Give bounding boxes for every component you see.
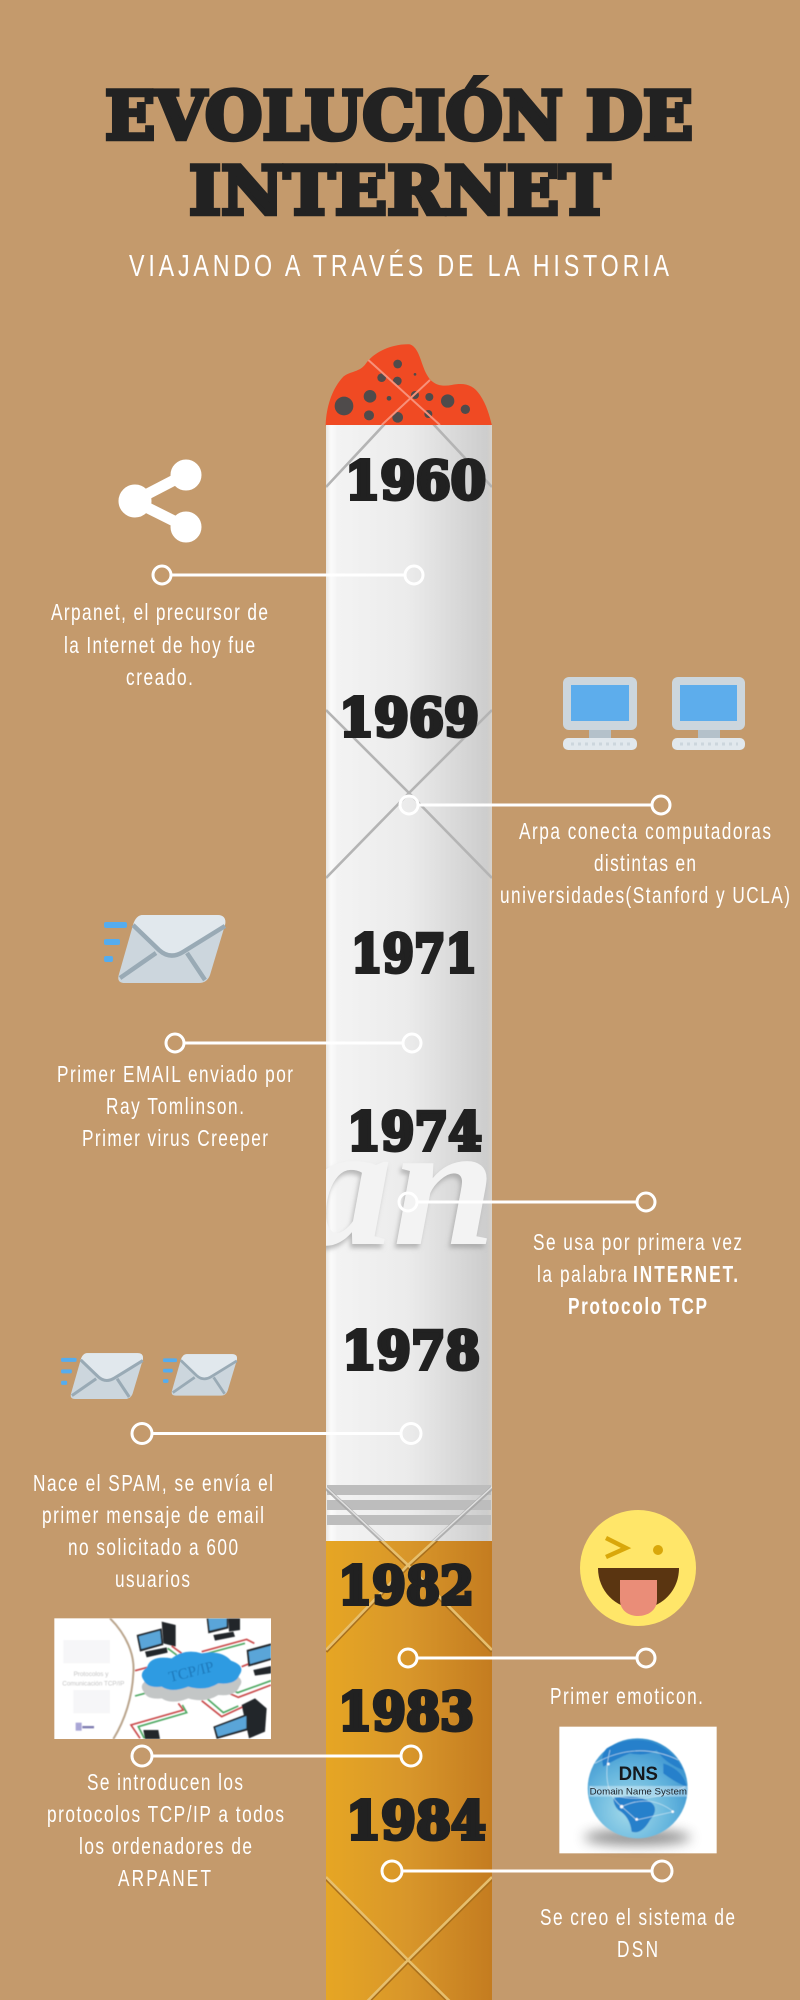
text 1984 xyxy=(540,1906,735,1963)
year: 1971: 1971 xyxy=(351,924,477,985)
small envelope right xyxy=(163,1354,237,1396)
watermark word on paper: an xyxy=(300,1088,496,1283)
text 1978: primer mensaje de email xyxy=(42,1504,264,1529)
image: TCP/IP network: TCP/IP xyxy=(167,1658,216,1686)
image: DNS globe: Domain Name System xyxy=(590,1787,687,1797)
icon: winking emoji xyxy=(580,1510,696,1626)
crossing seam lines on filter tip xyxy=(326,1541,492,2000)
title xyxy=(105,77,693,230)
connector 1982 xyxy=(399,1649,655,1667)
subtitle: VIAJANDO A TRAVÉS DE LA HISTORIA xyxy=(129,248,670,283)
text 1983: ARPANET xyxy=(118,1867,211,1892)
text 1971 xyxy=(57,1063,293,1152)
text 1971: Ray Tomlinson. xyxy=(106,1095,244,1120)
text 1971: Primer EMAIL enviado por xyxy=(57,1063,293,1088)
year: 1982: 1982 xyxy=(338,1556,474,1617)
text 1969: distintas en xyxy=(594,852,696,877)
text 1978: Nace el SPAM, se envía el xyxy=(33,1472,273,1497)
year: 1984: 1984 xyxy=(346,1791,486,1852)
text 1974: Protocolo TCP xyxy=(568,1295,707,1320)
small envelope left xyxy=(61,1353,143,1399)
text 1969 xyxy=(500,820,790,909)
connector 1971 xyxy=(166,1034,421,1052)
text 1971: Primer virus Creeper xyxy=(82,1127,268,1152)
text 1984: DSN xyxy=(617,1938,658,1963)
connector 1978 xyxy=(132,1424,421,1444)
year: 1983: 1983 xyxy=(338,1682,474,1743)
icon: share xyxy=(119,460,201,542)
text 1974: la palabra xyxy=(537,1263,628,1288)
text 1978: no solicitado a 600 xyxy=(68,1536,238,1561)
text 1983: protocolos TCP/IP a todos xyxy=(47,1803,284,1828)
connector 1974 xyxy=(399,1193,655,1211)
image: TCP/IP network: Protocolos y xyxy=(74,1671,109,1678)
cigarette filter tip xyxy=(326,1541,492,2000)
year: 1960: 1960 xyxy=(345,451,486,512)
image: TCP/IP network xyxy=(54,1618,271,1739)
cigarette filter bands xyxy=(327,1485,491,1525)
image: TCP/IP network: Comunicación TCP/IP xyxy=(62,1680,124,1687)
text 1969: Arpa conecta computadoras xyxy=(519,820,771,845)
text 1984: Se creo el sistema de xyxy=(540,1906,735,1931)
icon: envelope xyxy=(104,915,225,983)
text 1983 xyxy=(47,1771,284,1892)
year: 1978: 1978 xyxy=(342,1321,480,1382)
text 1978 xyxy=(33,1472,273,1593)
year: 1969: 1969 xyxy=(339,688,479,749)
connector 1984 xyxy=(382,1861,672,1881)
text 1983: los ordenadores de xyxy=(79,1835,252,1860)
text 1974: Se usa por primera vez xyxy=(533,1231,742,1256)
text 1960: Arpanet, el precursor de xyxy=(51,601,268,626)
title: INTERNET xyxy=(189,152,610,230)
text 1978: usuarios xyxy=(115,1568,190,1593)
cigarette paper xyxy=(326,425,492,1542)
icons: two small envelopes xyxy=(61,1353,237,1399)
computer left xyxy=(563,677,637,750)
connector 1969 xyxy=(400,796,670,814)
year: 1974: 1974 xyxy=(347,1102,482,1163)
crossing seam lines on paper xyxy=(326,425,492,1541)
text 1960 xyxy=(51,601,268,691)
computer right xyxy=(672,677,745,750)
text 1983: Se introducen los xyxy=(87,1771,243,1796)
title: EVOLUCIÓN DE xyxy=(105,77,693,155)
image: DNS globe xyxy=(559,1727,717,1853)
text 1960: creado. xyxy=(126,666,193,691)
image: DNS globe: DNS xyxy=(619,1764,658,1785)
text 1969: universidades(Stanford y UCLA) xyxy=(500,884,790,909)
text 1982: Primer emoticon. xyxy=(550,1685,703,1710)
connector 1983 xyxy=(132,1746,421,1766)
icon: two computers xyxy=(563,677,745,750)
text 1974: INTERNET. xyxy=(633,1263,738,1288)
text 1960: la Internet de hoy fue xyxy=(64,634,255,659)
cigarette xyxy=(326,344,492,2000)
text 1974 xyxy=(533,1231,742,1320)
cigarette ember xyxy=(326,344,492,426)
connector 1960 xyxy=(153,566,423,584)
